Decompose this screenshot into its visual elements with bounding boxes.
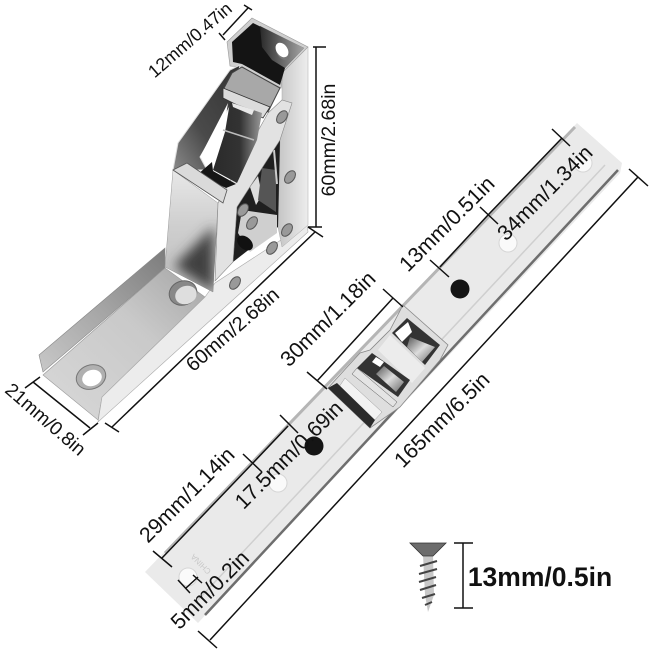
mechanism base bbox=[328, 305, 448, 428]
rivets bbox=[227, 109, 298, 291]
screw head bbox=[410, 543, 446, 556]
mechanism dark band bbox=[328, 383, 375, 428]
lower bright plate bbox=[337, 378, 382, 423]
upright front face bbox=[165, 170, 218, 292]
main face bbox=[145, 123, 622, 623]
base floor bbox=[43, 268, 205, 420]
5mm dimension bbox=[178, 575, 202, 593]
wood screw bbox=[410, 543, 446, 612]
window highlight bbox=[372, 357, 384, 367]
window frame rail bbox=[173, 65, 240, 170]
lower window bbox=[357, 353, 410, 397]
dark hole upper bbox=[450, 280, 470, 298]
12mm dimension bbox=[219, 5, 252, 40]
label: screw 13mm: 13mm/0.5in bbox=[468, 562, 612, 592]
stamped mark: CHINA bbox=[189, 552, 213, 576]
screw dimension bbox=[454, 543, 473, 608]
roller bar bbox=[223, 88, 270, 118]
165mm dimension bbox=[198, 169, 648, 648]
upper roller bbox=[407, 337, 435, 362]
base middle hole bbox=[166, 277, 200, 309]
label: lower 60mm: 60mm/2.68in bbox=[182, 284, 284, 376]
dark cylinder bbox=[213, 102, 262, 183]
17.5mm dimension bbox=[243, 415, 298, 472]
label: 165mm: 165mm/6.5in bbox=[390, 368, 494, 472]
right straight bracket bbox=[145, 123, 622, 623]
cylinder cap bbox=[232, 103, 254, 115]
34mm dimension bbox=[480, 129, 570, 224]
lower pale groove bbox=[198, 165, 605, 600]
left folded bracket bbox=[39, 18, 308, 422]
lower 60mm dimension bbox=[105, 227, 323, 432]
21mm dimension bbox=[25, 377, 98, 435]
lower roller bbox=[376, 366, 404, 392]
lower bar bbox=[352, 368, 397, 407]
right side plate bbox=[278, 47, 308, 247]
upper white gap bbox=[395, 322, 412, 342]
cylinder ring bbox=[223, 130, 254, 140]
label: 30mm: 30mm/1.18in bbox=[276, 267, 380, 371]
29mm dimension bbox=[153, 464, 252, 567]
frame lower band bbox=[173, 163, 227, 203]
top box opening bbox=[227, 18, 308, 88]
screw threads bbox=[419, 561, 437, 605]
mechanism cavity bbox=[233, 140, 280, 262]
13mm dimension bbox=[430, 215, 488, 277]
label: 21mm: 21mm/0.8in bbox=[1, 380, 89, 460]
front face shadow bbox=[174, 226, 214, 292]
base back wall bbox=[39, 248, 165, 372]
base end hole bbox=[73, 361, 109, 393]
screw shaft bbox=[423, 555, 434, 612]
dark triangle bbox=[197, 162, 236, 188]
30mm dimension bbox=[307, 289, 403, 389]
label: 29mm: 29mm/1.14in bbox=[135, 443, 239, 547]
label: 34mm: 34mm/1.34in bbox=[493, 141, 597, 245]
top window bbox=[222, 67, 280, 112]
label: 5mm: 5mm/0.2in bbox=[166, 546, 254, 634]
upper window bbox=[392, 318, 440, 365]
lower dark groove bbox=[205, 170, 618, 615]
pale holes bbox=[179, 154, 592, 586]
inner spring metal bbox=[234, 150, 277, 253]
base front lip bbox=[98, 223, 308, 422]
label: 13mm: 13mm/0.51in bbox=[395, 172, 499, 276]
vertical 60mm dimension bbox=[308, 47, 326, 227]
upper gray edge bbox=[165, 127, 575, 553]
dark hole lower bbox=[304, 436, 324, 456]
label: 12mm: 12mm/0.47in bbox=[144, 0, 236, 82]
label: 17.5mm: 17.5mm/0.69in bbox=[230, 396, 348, 514]
label: vertical 60mm: 60mm/2.68in bbox=[318, 84, 340, 196]
white slit bbox=[200, 103, 228, 163]
diagonal link plate bbox=[215, 100, 292, 281]
middle bright band bbox=[378, 335, 425, 383]
